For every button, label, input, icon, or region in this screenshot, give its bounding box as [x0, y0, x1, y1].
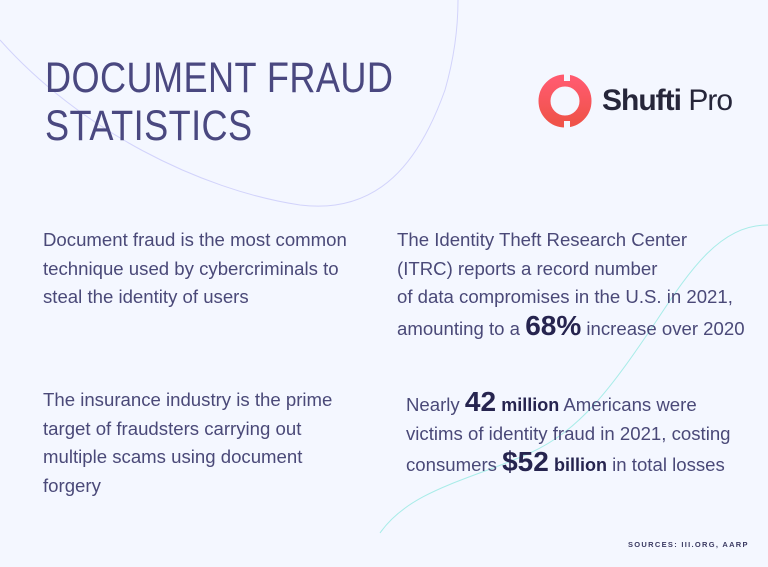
text block: document fraud common: Document fraud is the most common: [43, 229, 347, 250]
title: [45, 54, 393, 150]
text block: ITRC: The Identity Theft Research Center: [397, 229, 687, 250]
icon: logo ring: [538, 74, 592, 128]
text block: document fraud common: technique used by cybercriminals to: [43, 258, 339, 278]
title: STATISTICS: [45, 102, 253, 150]
logo text: Shufti Pro: [602, 84, 732, 117]
sources: SOURCES: III.ORG, AARP: [628, 540, 749, 549]
text block: ITRC: [397, 229, 745, 340]
text block: insurance: [43, 389, 332, 496]
text block: document fraud common: steal the identity of users: [43, 286, 249, 307]
text block: insurance: target of fraudsters carrying out: [43, 418, 301, 438]
text block: ITRC: (ITRC) reports a record number: [397, 258, 657, 278]
text block: insurance: forgery: [43, 474, 101, 496]
text block: ITRC: amounting to a 68% increase over 2020: [397, 310, 745, 340]
logo: [538, 74, 732, 128]
text block: document fraud common: [43, 229, 347, 307]
text block: 42 million: Nearly 42 million Americans were: [406, 386, 697, 417]
text block: 42 million: [406, 386, 731, 477]
text block: 42 million: victims of identity fraud in 2021, costing: [406, 422, 731, 444]
text block: insurance: The insurance industry is the prime: [43, 389, 332, 410]
text block: 42 million: consumers $52 billion in total losses: [406, 446, 725, 477]
text block: insurance: multiple scams using document: [43, 446, 302, 467]
text block: ITRC: of data compromises in the U.S. in 2021,: [397, 286, 733, 307]
title: DOCUMENT FRAUD: [45, 54, 393, 102]
